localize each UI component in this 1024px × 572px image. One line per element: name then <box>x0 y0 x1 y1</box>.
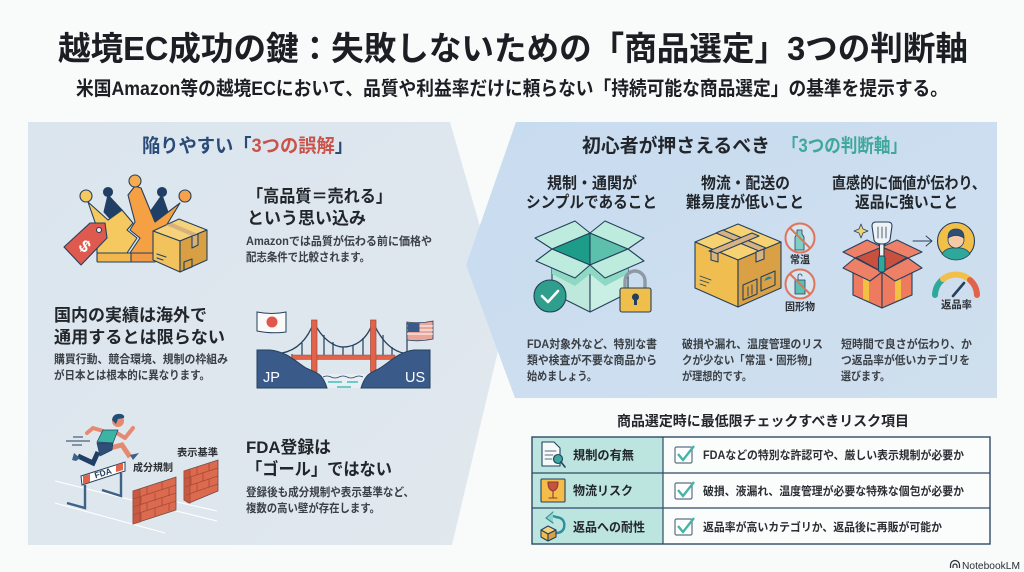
small brick wall <box>184 460 218 503</box>
axis 2 description: クが少ない「常温・固形物」 <box>682 353 818 367</box>
heading accent: 「3つの判断軸」 <box>782 135 907 157</box>
icon: open teal box with check and lock <box>534 221 651 312</box>
axis 1 description: 類や検査が不要な商品から <box>527 353 657 367</box>
hurdle label: FDA <box>93 466 113 480</box>
label: labeling standards: 表示基準 <box>177 446 218 459</box>
misconception 1 title line 2: という思い込み <box>247 209 366 228</box>
row label: return tolerance: 返品への耐性 <box>573 520 645 534</box>
axis 3 description: 短時間で良さが伝わり、か <box>841 337 972 351</box>
axis 2 description <box>682 337 823 383</box>
icon: return box with arrow <box>541 512 564 541</box>
misconception 2 title: 国内の実績は海外で <box>54 306 207 325</box>
axis 1 heading line 2: シンプルであること <box>526 194 657 212</box>
row label: regulation: 規制の有無 <box>573 448 634 462</box>
axis 1 description: FDA対象外など、特別な書 <box>527 337 657 351</box>
icon: American flag <box>407 321 433 352</box>
misconception 1 title: 「高品質＝売れる」 <box>247 186 392 206</box>
misconception 2 description line 2: が日本とは根本的に異なります。 <box>54 368 210 382</box>
icon: dollar sign on tag: $ <box>75 236 95 257</box>
NotebookLM logo: NotebookLM <box>962 560 1020 572</box>
axis 1 description: 始めましょう。 <box>527 369 597 383</box>
axis 1 description <box>527 337 657 383</box>
subtitle: 米国Amazon等の越境ECにおいて、品質や利益率だけに頼らない「持続可能な商品選定」の基準を提示する。 <box>76 77 948 100</box>
big brick wall <box>133 477 176 524</box>
label: room temperature: 常温 <box>790 253 810 266</box>
title: 越境EC成功の鍵：失敗しないための「商品選定」3つの判断軸 <box>58 30 968 67</box>
misconception 3 description line 2: 複数の高い壁が存在します。 <box>246 501 380 515</box>
label: JP: JP <box>263 370 280 386</box>
misconception 3 title line 2: 「ゴール」ではない <box>246 459 392 479</box>
row text 3: 返品率が高いカテゴリか、返品後に再販が可能か <box>703 520 942 534</box>
misconception 2 title line 2: 通用するとは限らない <box>54 328 225 347</box>
icon: bridge between Japan and US <box>257 312 433 388</box>
checkbox 2 <box>675 482 694 499</box>
label: return rate: 返品率 <box>941 298 972 311</box>
axis 2 description: 破損や漏れ、温度管理のリス <box>682 337 823 351</box>
panel: decision axes <box>466 122 997 398</box>
axis 3 description: 選びます。 <box>841 369 890 383</box>
misconception 2 description: 購買行動、競合環境、規制の枠組み <box>54 352 228 366</box>
axis 3 heading: 直感的に価値が伝わり、 <box>832 174 986 192</box>
icon: hurdler and brick walls <box>55 414 218 533</box>
risk checklist table <box>532 437 990 544</box>
axis 3 description: つ返品率が低いカテゴリを <box>841 353 970 367</box>
checkbox 3 <box>675 518 694 535</box>
axis 3 description <box>841 337 972 383</box>
checkbox 1 <box>675 446 694 463</box>
misconception 1 description line 2: 配志条件で比較されます。 <box>246 250 370 264</box>
icon: open red box with spatula, customer and gauge <box>843 222 977 308</box>
row text 2: 破損、液漏れ、温度管理が必要な特殊な個包が必要か <box>703 484 964 498</box>
row text 1: FDAなどの特別な許認可や、厳しい表示規制が必要か <box>703 448 964 462</box>
axis 2 heading line 2: 難易度が低いこと <box>686 192 804 212</box>
axis 3 heading line 2: 返品に強いこと <box>855 194 958 212</box>
label: US: US <box>405 370 425 386</box>
panel: misconceptions <box>28 122 506 545</box>
heading: misconceptions: 陥りやすい「3つの誤解」 <box>142 135 353 157</box>
icon: fragile label <box>541 479 565 502</box>
row label: logistics: 物流リスク <box>573 483 633 498</box>
axis 2 description: が理想的です。 <box>682 369 752 383</box>
heading: decision axes: 初心者が押さえるべき <box>582 134 770 157</box>
icon: Japanese flag <box>257 312 286 333</box>
checklist heading: 商品選定時に最低限チェックすべきリスク項目 <box>617 413 909 429</box>
icon: broken crown with price tag and box <box>64 175 207 272</box>
icon: document with magnifier <box>542 442 565 467</box>
misconception 3 title: FDA登録は <box>246 438 331 457</box>
axis 1 heading: 規制・通関が <box>547 174 637 192</box>
label: solid goods: 固形物 <box>785 300 815 313</box>
axis 2 heading: 物流・配送の <box>701 174 790 192</box>
misconception 3 description: 登録後も成分規制や表示基準など、 <box>246 485 414 499</box>
label: ingredient rules: 成分規制 <box>133 461 173 474</box>
misconception 1 description: Amazonでは品質が伝わる前に価格や <box>246 234 432 248</box>
icon: cardboard box with no-go items <box>695 224 814 307</box>
